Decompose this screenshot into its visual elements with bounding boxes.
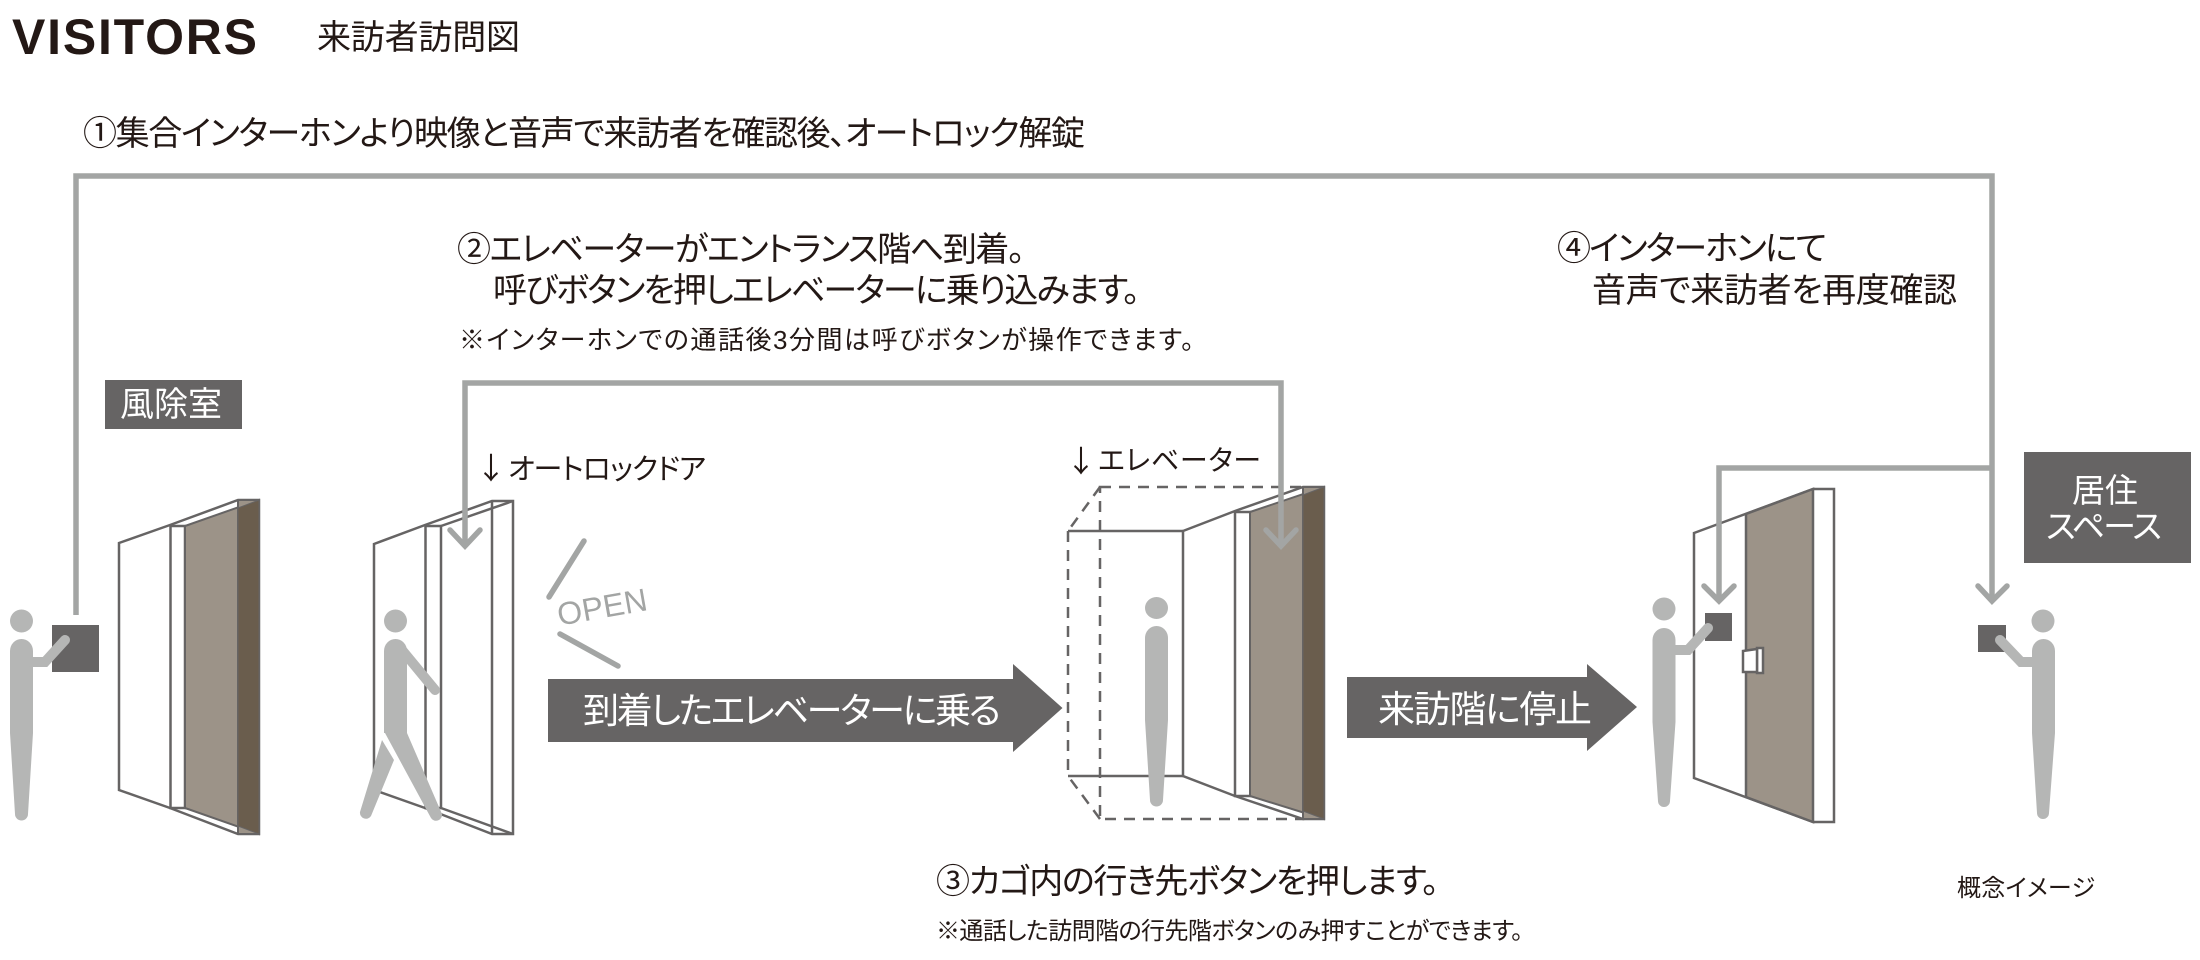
step 3 text: ※通話した訪問階の行先階ボタンのみ押すことができます。: [936, 918, 1523, 945]
step 2 text: ※インターホンでの通話後3分間は呼びボタンが操作できます。: [459, 325, 1194, 355]
caption: concept image: 概念イメージ: [1957, 875, 2095, 902]
step 2 text: 呼びボタンを押しエレベーターに乗り込みます。: [493, 272, 1140, 310]
arrow: stop at visiting floor: [1347, 664, 1637, 751]
door: residence front door: [1694, 489, 1834, 822]
connector 4: residence to door panel: [1704, 468, 1992, 601]
arrow: stop at visiting floor: 来訪階に停止: [1378, 689, 1592, 730]
label: auto-lock door: [476, 444, 706, 488]
arrow: board the elevator: [548, 664, 1062, 752]
label: auto-lock door: オートロックドア: [508, 454, 706, 486]
intercom: entrance panel: [52, 625, 99, 672]
label: residential space: スペース: [2046, 508, 2162, 545]
intercom: door panel: [1705, 613, 1732, 641]
label: windbreak room: 風除室: [120, 386, 222, 424]
connector 2: auto-lock to elevator: [450, 383, 1296, 546]
person: resident at monitor: [2000, 610, 2055, 819]
arrow: board the elevator: 到着したエレベーターに乗る: [583, 690, 1001, 731]
door: auto-lock door open: [374, 501, 513, 834]
intercom: residence monitor: [1978, 625, 2006, 652]
title: VISITORS: [12, 9, 257, 65]
step 2 text: [457, 231, 1194, 355]
step 4 text: 音声で来訪者を再度確認: [1592, 272, 1957, 310]
step 1 text: ①集合インターホンより映像と音声で来訪者を確認後、オートロック解錠: [83, 115, 1085, 153]
subtitle: 来訪者訪問図: [317, 19, 520, 57]
label: auto-lock door: ↓: [476, 444, 506, 488]
step 3 text: ③カゴ内の行き先ボタンを押します。: [936, 863, 1439, 901]
person: inside elevator: [1145, 597, 1168, 806]
person: at door intercom: [1652, 598, 1708, 807]
step 4 text: ④インターホンにて: [1557, 230, 1827, 268]
open indicator: OPEN: [554, 581, 650, 633]
label: elevator: [1066, 437, 1261, 481]
label: residential space: [2024, 452, 2191, 563]
step 2 text: ②エレベーターがエントランス階へ到着。: [457, 231, 1025, 269]
connector 1: panel to residence: [76, 176, 2007, 615]
open indicator: [549, 541, 650, 666]
label: windbreak room: [105, 380, 242, 429]
door: windbreak room door: [119, 500, 259, 834]
label: residential space: 居住: [2072, 472, 2138, 509]
person: at entrance intercom: [10, 610, 65, 820]
label: elevator: エレベーター: [1098, 445, 1261, 476]
person: walking through door: [360, 610, 442, 821]
elevator car: [1068, 487, 1324, 819]
label: elevator: ↓: [1066, 437, 1096, 481]
step 3 text: [936, 863, 1523, 945]
step 4 text: [1557, 230, 1957, 310]
